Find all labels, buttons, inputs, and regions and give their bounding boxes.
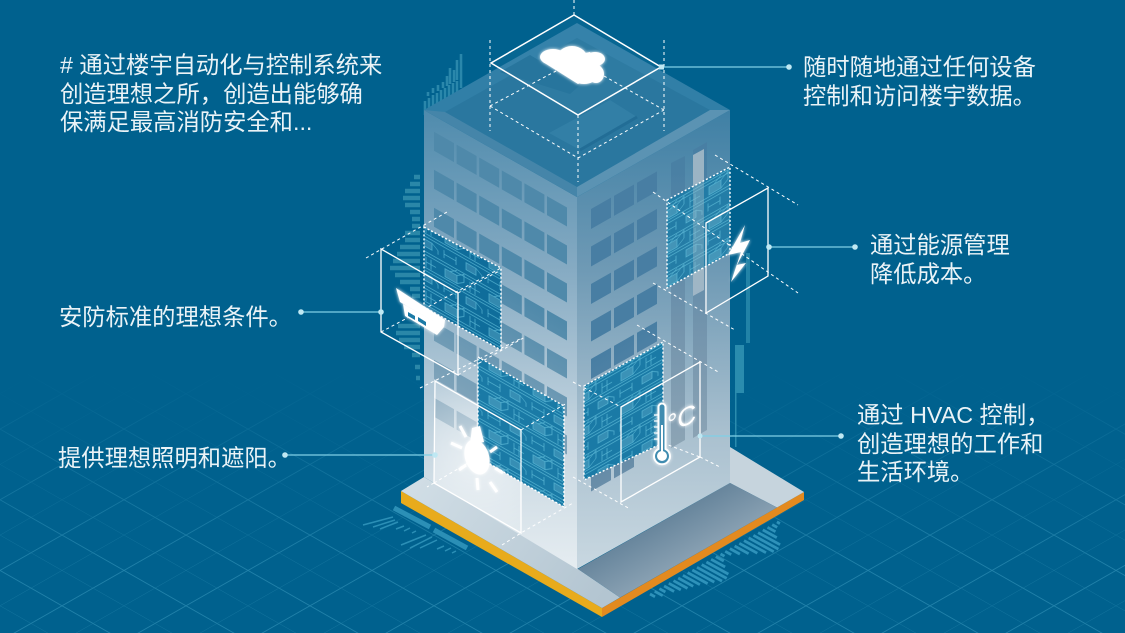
callout line: security (298, 309, 384, 315)
text: cloud access (803, 54, 1036, 109)
wireframe: bulb box (420, 338, 573, 545)
heading text (60, 52, 382, 135)
text: HVAC: 通过 HVAC 控制， (857, 402, 1049, 428)
blueprint panel: upper right (667, 167, 730, 288)
wireframe: camera box (366, 212, 525, 375)
bulb box glow (434, 381, 521, 533)
callout line: cloud (659, 64, 792, 70)
right wall windows (591, 171, 657, 492)
blueprint panel: upper left (424, 227, 501, 350)
data bars: left of building (390, 177, 420, 378)
heading text: # 通过楼宇自动化与控制系统来 (60, 52, 382, 78)
text: cloud access: 随时随地通过任何设备 (803, 54, 1036, 80)
roof (424, 23, 730, 197)
text: lighting: 提供理想照明和遮阳。 (58, 445, 291, 471)
heading text: 创造理想之所，创造出能够确 (60, 81, 363, 107)
icon: cloud (540, 46, 605, 84)
blueprint panel: lower right (584, 342, 663, 480)
text: HVAC (857, 402, 1049, 485)
callout line: lighting (282, 452, 438, 458)
text: cloud access: 控制和访问楼宇数据。 (803, 83, 1036, 109)
wireframe: cloud box (490, 0, 664, 182)
left wall (424, 110, 577, 569)
heading text: 保满足最高消防安全和... (60, 109, 312, 135)
left wall windows (434, 132, 567, 493)
text: energy management (870, 232, 1010, 287)
wireframe: thermometer box (573, 325, 720, 509)
right wall door strips (671, 142, 707, 448)
icon: thermometer: °C (667, 397, 696, 440)
data bars: ground left (363, 508, 467, 553)
text: HVAC: 生活环境。 (857, 459, 973, 485)
callout line: HVAC (698, 433, 844, 439)
icon: lightning bolt (728, 225, 750, 282)
building (424, 23, 730, 569)
right wall (577, 110, 730, 569)
data bars: behind roof (425, 54, 461, 115)
data bars: right of building (735, 253, 750, 447)
data bars: ground right (650, 522, 780, 597)
platform base (401, 447, 804, 617)
text: energy management: 通过能源管理 (870, 232, 1010, 258)
text: energy management: 降低成本。 (870, 261, 986, 287)
icon: light bulb (451, 426, 503, 492)
icon: thermometer (654, 397, 696, 464)
blueprint panel: lower left (478, 357, 564, 507)
icon: security camera (396, 288, 445, 335)
text: security: 安防标准的理想条件。 (59, 304, 292, 330)
callout line: energy (766, 244, 858, 250)
wireframe: lightning box (653, 155, 798, 330)
text: HVAC: 创造理想的工作和 (857, 431, 1043, 457)
